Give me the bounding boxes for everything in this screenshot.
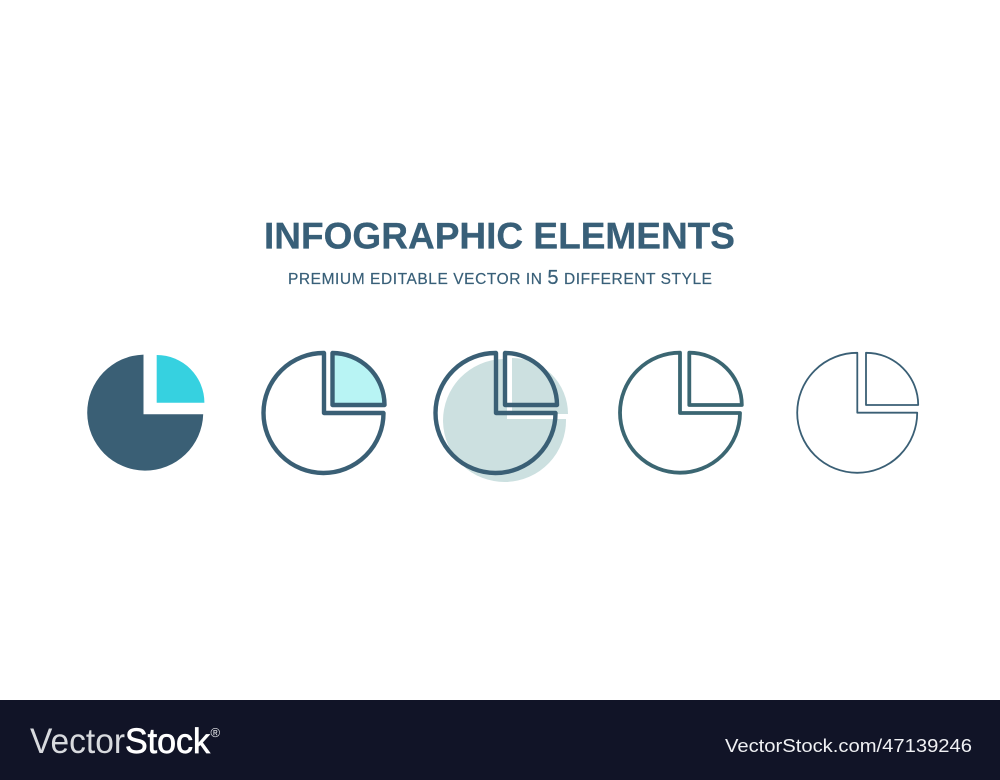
icon: outlined pie chart with offset shadow [436,353,568,482]
icon: thin outline pie chart [797,353,918,473]
footer bar [0,700,1000,780]
title: INFOGRAPHIC ELEMENTS [264,215,735,256]
footer image id: VectorStock.com/47139246 [725,736,972,756]
footer logo: Vector [30,722,125,761]
subtitle: PREMIUM EDITABLE VECTOR IN 5 DIFFERENT STYLE [288,267,712,289]
footer logo [30,722,220,761]
icon: outlined pie chart with light fill [264,353,384,473]
icon: solid pie chart [87,355,204,471]
footer logo: ® [210,725,220,740]
footer logo: Stock [125,722,210,761]
icon: medium outline pie chart [620,353,742,473]
